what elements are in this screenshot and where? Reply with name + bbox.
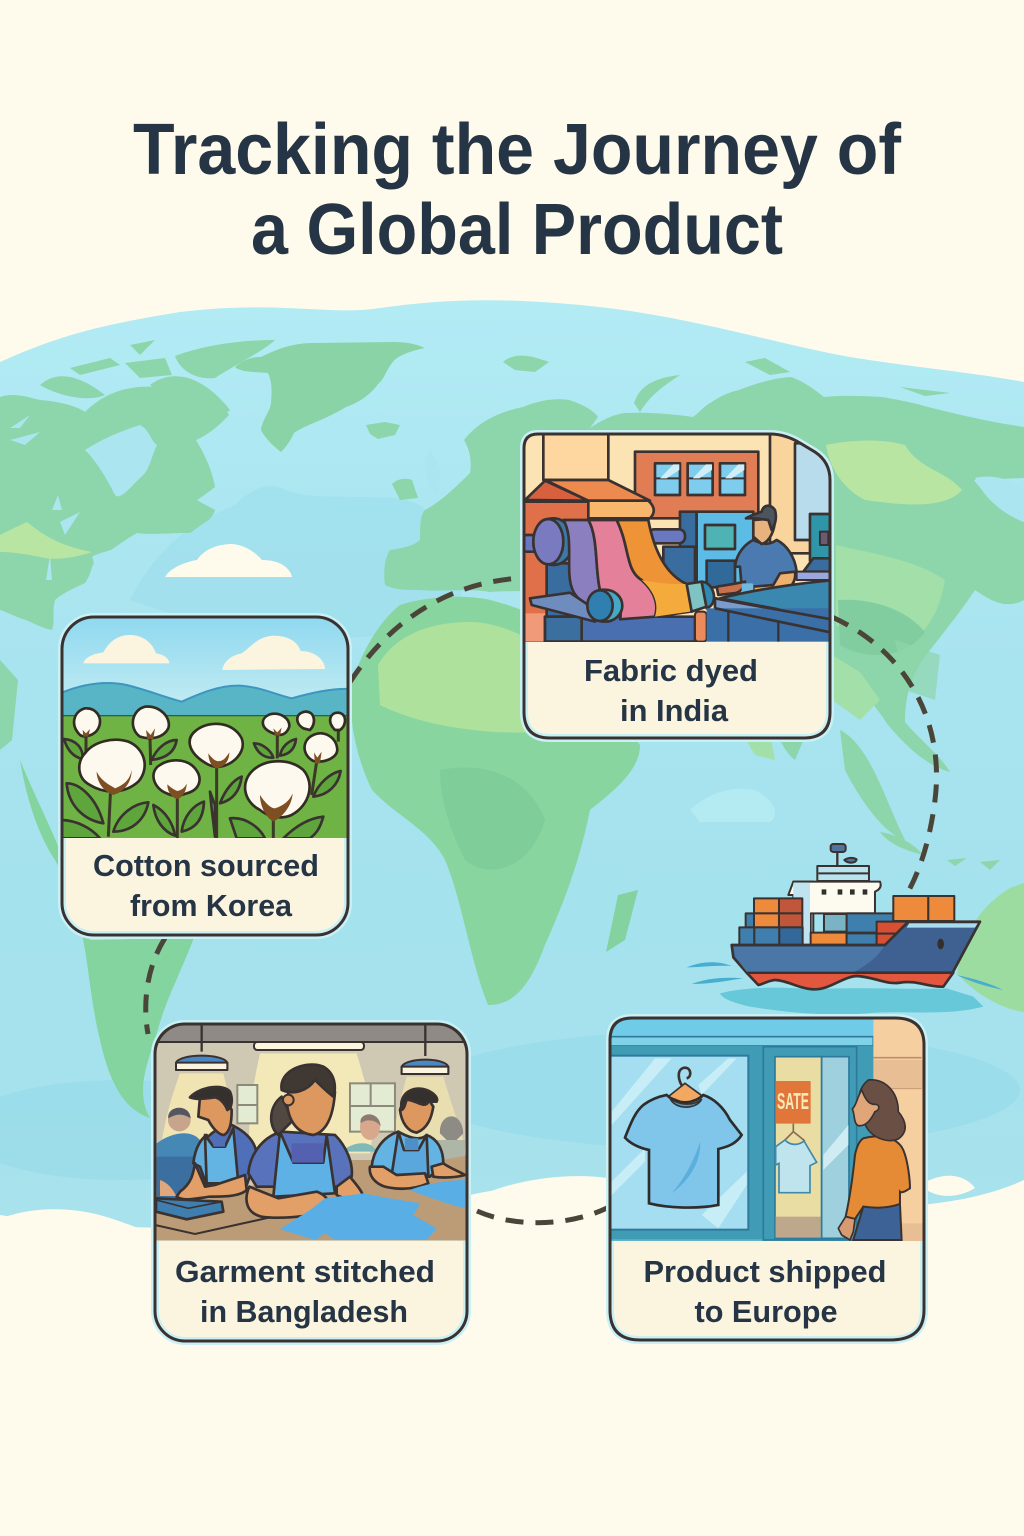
background workers: [168, 1114, 191, 1132]
land: Australia: [957, 883, 1024, 1012]
hull: [732, 922, 980, 973]
hood: [523, 502, 588, 642]
illustration: garment workers: [150, 1020, 470, 1243]
fabric right: [410, 1180, 465, 1208]
machine: [678, 510, 697, 546]
Hudson Bay: [85, 425, 157, 496]
card outline: [62, 617, 348, 935]
land: Africa: [350, 597, 640, 1005]
table: [156, 1156, 466, 1214]
land: Asia lighter regions: [826, 440, 962, 504]
title: [133, 110, 902, 270]
sale sign: [776, 1081, 811, 1124]
fabric bands: [563, 520, 600, 605]
card base: [155, 1024, 467, 1341]
land: South America: [20, 760, 195, 1118]
worker centre: [248, 1132, 352, 1187]
sale sign: SATE: [777, 1088, 809, 1114]
table right: [719, 581, 828, 608]
leaves: [60, 739, 341, 838]
worker: [735, 540, 797, 587]
route: garment to store: [477, 1208, 607, 1223]
main window: [610, 1056, 748, 1230]
route: cotton to dye: [350, 578, 522, 682]
panel: stitching: [150, 1020, 470, 1341]
label: in Bangladesh: [200, 1294, 408, 1329]
illustration: shop window: [605, 1015, 930, 1242]
table left: [530, 593, 595, 622]
card outline: [155, 1024, 467, 1341]
base: [545, 617, 695, 642]
faint sea cloud: [690, 789, 775, 822]
route: cotton to garment: [146, 938, 165, 1034]
route: dye to ship: [832, 617, 937, 892]
calyx: [83, 728, 322, 822]
label: [175, 1254, 435, 1329]
windows: [237, 1083, 395, 1132]
stems: [86, 730, 338, 838]
land: Iceland: [366, 422, 400, 439]
superstructure: [793, 882, 813, 945]
cloud on map: [165, 544, 292, 577]
land: SE Asia islands: [840, 640, 1000, 870]
land: North America: [0, 386, 229, 630]
label: [93, 848, 319, 923]
label: in India: [620, 693, 729, 728]
label: Garment stitched: [175, 1254, 435, 1289]
land: Greenland: [235, 342, 425, 452]
label: to Europe: [694, 1294, 838, 1329]
land: Eurasia: [384, 377, 1024, 772]
fabric roll ends: [687, 582, 707, 612]
water: [720, 988, 983, 1014]
label: Cotton sourced: [93, 848, 319, 883]
card outline: [610, 1018, 924, 1340]
card outline: [524, 434, 830, 738]
land: Canadian Arctic islands: [40, 340, 950, 425]
panel: dyeing: [520, 430, 837, 738]
t-shirt with hanger: [679, 1068, 690, 1090]
land: Madagascar: [606, 890, 638, 952]
title: a Global Product: [251, 190, 783, 270]
containers: [754, 898, 779, 913]
land: left edge: [0, 660, 18, 750]
title: Tracking the Journey of: [133, 110, 902, 190]
dashed route: [146, 578, 937, 1223]
card base: [610, 1018, 924, 1340]
worker left: [198, 1124, 256, 1186]
red waterline: [747, 973, 953, 989]
card base: [62, 617, 348, 935]
ocean: [0, 300, 1024, 1228]
ship: [687, 844, 1003, 1014]
label: Product shipped: [644, 1254, 886, 1289]
panel: retail: [605, 1015, 930, 1340]
panel: cotton: [60, 615, 350, 935]
label: [644, 1254, 886, 1329]
illustration: dye factory: [520, 430, 837, 643]
sewing machine: [156, 1198, 223, 1219]
worker right: [372, 1132, 443, 1177]
land: Antarctica: [5, 1209, 146, 1238]
label: [584, 653, 758, 728]
land: Mexico highlight: [0, 522, 92, 559]
card base: [524, 434, 830, 738]
illustration: cotton field: [60, 615, 350, 838]
door: [763, 1047, 857, 1240]
small shirt: [785, 1124, 805, 1141]
label: from Korea: [130, 888, 293, 923]
land: UK: [392, 479, 418, 500]
axles and roller: [648, 529, 685, 543]
world map: [0, 300, 1024, 1238]
brick wall and windows: [635, 452, 758, 518]
label: Fabric dyed: [584, 653, 758, 688]
woman: [846, 1136, 910, 1219]
fabric centre: [280, 1193, 437, 1240]
cotton bolls: [74, 707, 345, 817]
